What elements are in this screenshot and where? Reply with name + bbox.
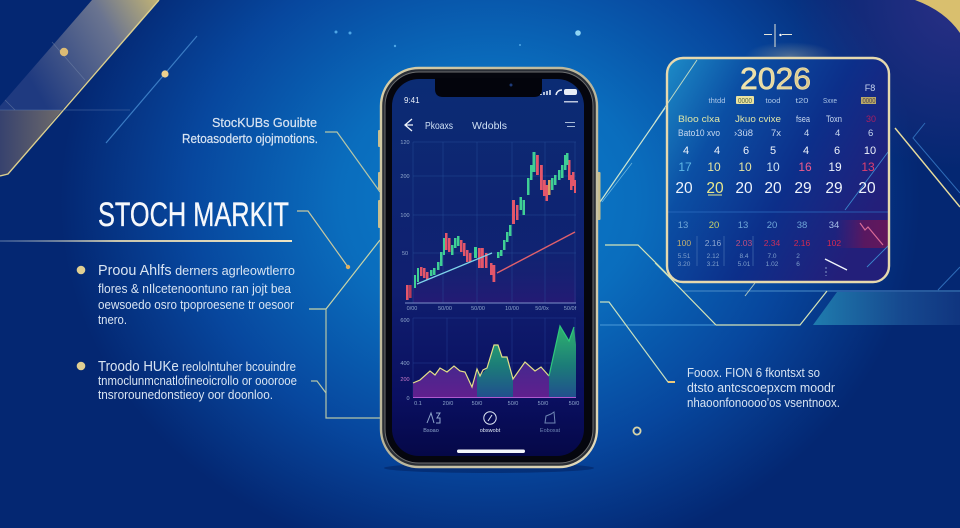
calendar header row: 4 [804,128,809,139]
calendar date rows: 10 [766,160,780,174]
calendar date rows: 13 [738,220,748,231]
phone [378,68,600,473]
title: STOCH MARKIT [98,196,289,234]
calendar date rows: 3.21 [707,261,720,268]
bullet block two: Troodo HUKe reololntuher bcouindre [98,359,296,375]
floating dots top [334,30,581,47]
calendar header row: 30 [866,114,876,125]
candlestick chart: 0/00 [407,306,417,312]
calendar header row: Toxn [826,114,842,125]
calendar header row [678,114,876,139]
notch [435,78,542,97]
phone buttons [378,130,600,228]
bullet block one: flores & nIlcetenoontuno ran jojt bea [98,281,292,296]
calendar date rows: 1.02 [766,261,779,268]
calendar month row: tood [766,98,781,105]
calendar date rows: 38 [797,220,807,231]
area chart: 600 [400,318,410,324]
app header: Wdobls [472,121,507,132]
bullet block two [77,359,297,402]
calendar header row: 4 [835,128,840,139]
calendar date rows: 6 [796,261,800,268]
calendar date rows: 4 [714,145,720,157]
candlestick chart: 50/0x [535,306,549,312]
calendar month row [708,83,876,105]
sparkle icon [764,24,792,47]
decorative diagonal line with dot [106,36,197,143]
calendar date rows: 10 [707,160,721,174]
bullet block one: tnero. [98,312,127,327]
calendar date rows: 5.51 [678,253,691,260]
nav icon: compass [484,412,496,424]
gold corner top right [915,0,960,33]
calendar date rows: 19 [828,160,842,174]
icon: ring dot [633,427,641,435]
candlestick chart: 50/0f [564,306,577,312]
calendar month row: thtdd [708,98,726,105]
calendar header row: 7x [771,128,781,139]
candlestick chart: 10/00 [505,306,519,312]
calendar date rows: 6 [834,145,840,157]
calendar date rows: 34 [829,220,839,231]
nav icon: chart [427,413,440,423]
candlestick chart: 120 [400,140,410,146]
calendar date rows: 8.4 [739,253,749,260]
area chart: 50/0 [508,401,518,407]
candlestick chart [400,140,577,312]
status bar: 9:41 [404,96,420,105]
phone shadow [384,463,594,473]
calendar month row: Sxxe [823,98,837,105]
calendar panel [655,42,889,288]
calendar date rows: 2.34 [764,238,781,248]
nav labels: obswobt [480,428,501,434]
candles green [414,152,568,288]
area chart: 200 [400,377,410,383]
trend lines [417,253,492,284]
text: top callout [182,115,318,146]
calendar date rows: 20 [767,220,777,231]
calendar date rows: 2.12 [707,253,720,260]
calendar date rows: 20 [675,180,693,197]
candlestick chart: 50/00 [438,306,452,312]
calendar month row: 0000 [738,98,752,105]
area chart: 0.1 [414,401,422,407]
calendar header row: 6 [868,128,873,139]
bullet block one [77,263,295,327]
calendar date rows: 2.03 [736,238,753,248]
area chart: 50/0 [472,401,482,407]
calendar date rows: 29 [825,180,843,197]
calendar month row: 0000 [862,98,876,105]
candles red [406,155,576,300]
nav labels: Eoboxat [540,428,561,434]
right callout: nhaoonfonoooo'os vsentnoox. [687,395,840,410]
calendar header row: ›3ü8 [734,128,753,139]
calendar date rows: 20 [735,180,753,197]
bullet block one: oewsoedo osro tpoproesene tr oesoor [98,297,295,312]
calendar date rows: 10 [738,160,752,174]
calendar year: 2026 [740,61,811,96]
area chart: 400 [400,361,410,367]
calendar date rows: 2.16 [705,238,722,248]
candlestick chart: 50/00 [471,306,485,312]
nav icon: folder [545,412,555,423]
calendar date rows: 20 [764,180,782,197]
calendar date rows: 100 [677,238,691,248]
calendar date rows: 29 [794,180,812,197]
text: top callout: Retoasoderto ojojmotions. [182,132,318,146]
calendar month row: t20 [796,98,809,105]
calendar header row: Bloo clxa [678,114,721,125]
calendar mini lines [697,223,883,276]
text: top callout: StocKUBs Gouibte [212,115,317,130]
calendar date rows: 3.20 [678,261,691,268]
candlestick chart: 200 [400,174,410,180]
area chart: 50/0 [538,401,548,407]
area chart: 50/0 [569,401,579,407]
app header [405,119,575,132]
calendar month row: F8 [865,83,875,93]
calendar header row: Jkuo cvixe [735,114,781,125]
calendar date rows [675,145,876,268]
right callout: Fooox. FION 6 fkontsxt so [687,365,820,380]
area chart: 0 [406,396,410,402]
calendar date rows: 2.16 [794,238,811,248]
calendar date rows: 5.01 [738,261,751,268]
area chart: 20/0 [443,401,453,407]
calendar date rows: 2 [796,253,800,260]
decorative gold band top left [0,0,159,176]
calendar date rows: 4 [683,145,689,157]
background lines right side [600,123,960,325]
status bar [404,89,578,105]
nav labels: Bsoao [423,428,439,434]
calendar date rows: 102 [827,238,841,248]
bottom nav [423,412,561,434]
phone screen [392,79,584,456]
calendar date rows: 6 [743,145,749,157]
calendar header row: Bato10 xvo [678,128,720,139]
candlestick chart: 50 [402,251,408,257]
calendar date rows: 7.0 [767,253,777,260]
calendar date rows: 13 [678,220,688,231]
calendar date rows: 4 [803,145,809,157]
connector lines [297,108,827,418]
calendar header row: fsea [796,114,811,125]
candlestick chart: 100 [400,213,410,219]
calendar date rows: 20 [706,180,724,197]
bullet block two: tnsrorounedonstieoy oor doonloo. [98,388,273,402]
calendar date rows: 10 [864,145,876,157]
home indicator [457,450,525,453]
calendar date rows: 16 [798,160,812,174]
app header: Pkoaxs [425,121,453,132]
right callout: dtsto antcscoepxcm moodr [687,380,836,395]
calendar date rows: 5 [770,145,776,157]
area chart [400,318,579,407]
bullet block one: Proou Ahlfs derners agrleowtlerro [98,263,295,279]
right callout [687,365,840,410]
calendar date rows: 20 [709,220,719,231]
calendar date rows: 17 [678,160,692,174]
nav labels [423,428,561,434]
calendar date rows: 20 [858,180,876,197]
bullet block two: tnmoclunmcnatlofineoicrollo or ooorooe [98,374,297,388]
calendar date rows: 13 [861,160,875,174]
